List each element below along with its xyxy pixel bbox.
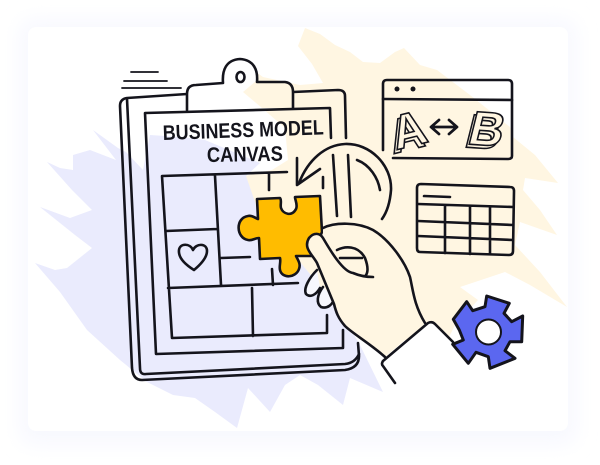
palm and thumb outline xyxy=(307,224,425,357)
title xyxy=(162,116,324,167)
clipboard board inner edge xyxy=(127,99,359,374)
palm fill xyxy=(307,224,425,357)
speed lines xyxy=(122,72,181,88)
letter A: A xyxy=(386,101,432,161)
clipboard board right edge xyxy=(293,90,346,138)
clipboard clip xyxy=(187,59,293,110)
letter B: B xyxy=(460,105,508,160)
curved arrow xyxy=(297,144,391,219)
clip hole xyxy=(236,72,244,82)
double arrow xyxy=(431,120,457,134)
window header xyxy=(383,99,512,100)
icon: puzzle piece xyxy=(239,196,322,276)
lavender brush background xyxy=(35,130,383,428)
title: CANVAS xyxy=(207,143,283,167)
card xyxy=(28,27,568,431)
icon: heart xyxy=(179,245,207,270)
letter A: A xyxy=(383,105,429,165)
title: BUSINESS MODEL xyxy=(162,116,324,145)
cream brush background xyxy=(243,28,567,345)
table icon xyxy=(417,184,514,255)
fingers xyxy=(305,270,334,308)
browser window xyxy=(383,80,512,165)
paper outline xyxy=(145,108,343,354)
canvas grid xyxy=(162,172,327,338)
clipboard clip cream overlay xyxy=(243,81,293,108)
hand xyxy=(305,224,453,383)
icon: gear xyxy=(453,296,523,368)
window dots xyxy=(394,86,400,92)
letter B: B xyxy=(463,102,511,157)
cuff xyxy=(382,322,453,383)
clipboard board outline xyxy=(120,94,359,380)
clipboard clip outline xyxy=(187,59,293,110)
thumb crease xyxy=(337,247,367,275)
clipboard xyxy=(120,59,359,380)
